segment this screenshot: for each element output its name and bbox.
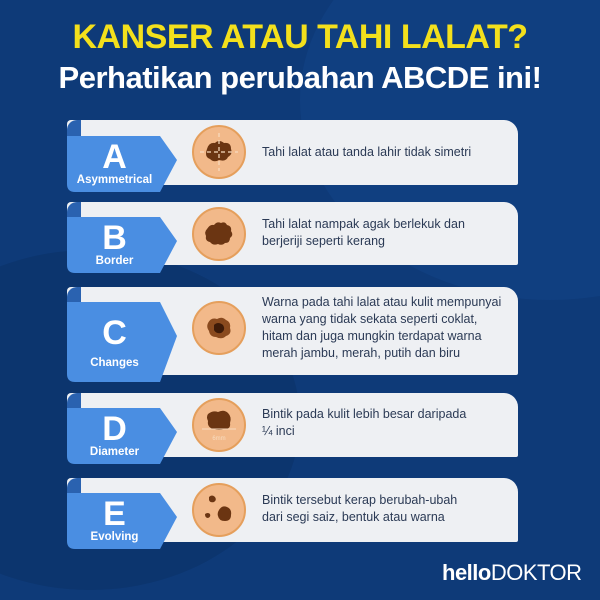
panel: B xyxy=(67,202,518,273)
text D: Bintik pada kulit lebih besar daripada xyxy=(262,407,466,421)
text B: Tahi lalat nampak agak berlekuk dan xyxy=(262,217,465,231)
tab E: E xyxy=(103,495,126,533)
text B: berjeriji seperti kerang xyxy=(262,234,385,248)
tab C xyxy=(67,302,177,382)
icon: irregular border mole xyxy=(192,207,246,261)
tab A: A xyxy=(102,138,127,176)
panel: D xyxy=(67,393,518,464)
tab B: Border xyxy=(96,255,133,267)
title: KANSER ATAU TAHI LALAT? xyxy=(72,18,528,56)
text D xyxy=(262,407,466,438)
tab A xyxy=(67,136,177,192)
tab E: Evolving xyxy=(91,531,138,543)
tab D xyxy=(67,408,177,464)
tab B xyxy=(67,217,177,273)
text E xyxy=(262,493,457,524)
tab D: D xyxy=(102,410,127,448)
text C xyxy=(262,295,501,360)
subtitle: Perhatikan perubahan ABCDE ini! xyxy=(59,60,541,95)
tab C: C xyxy=(102,314,127,352)
text E: Bintik tersebut kerap berubah-ubah xyxy=(262,493,457,507)
panel: A xyxy=(67,120,518,192)
text D: ¼ inci xyxy=(262,424,295,438)
text C: Warna pada tahi lalat atau kulit mempunyai xyxy=(262,295,501,309)
icon: evolving mole xyxy=(192,483,246,537)
logo: helloDOKTOR xyxy=(442,560,582,585)
text B xyxy=(262,217,465,248)
tab B: B xyxy=(102,219,127,257)
panel: E xyxy=(67,478,518,549)
tab D: Diameter xyxy=(90,446,139,458)
text C: hitam dan juga mungkin terdapat warna xyxy=(262,329,482,343)
tab C: Changes xyxy=(90,357,139,369)
icon: colour change mole xyxy=(192,301,246,355)
icon: diameter mole: 6mm xyxy=(212,436,226,442)
text E: dari segi saiz, bentuk atau warna xyxy=(262,510,445,524)
text C: warna yang tidak sekata seperti coklat, xyxy=(262,312,477,326)
panel: C xyxy=(67,287,518,382)
tab E xyxy=(67,493,177,549)
icon: diameter mole xyxy=(192,398,246,452)
text A: Tahi lalat atau tanda lahir tidak simetri xyxy=(262,145,471,159)
text C: merah jambu, merah, putih dan biru xyxy=(262,346,460,360)
tab A: Asymmetrical xyxy=(77,174,152,186)
icon: asymmetric mole xyxy=(192,125,246,179)
